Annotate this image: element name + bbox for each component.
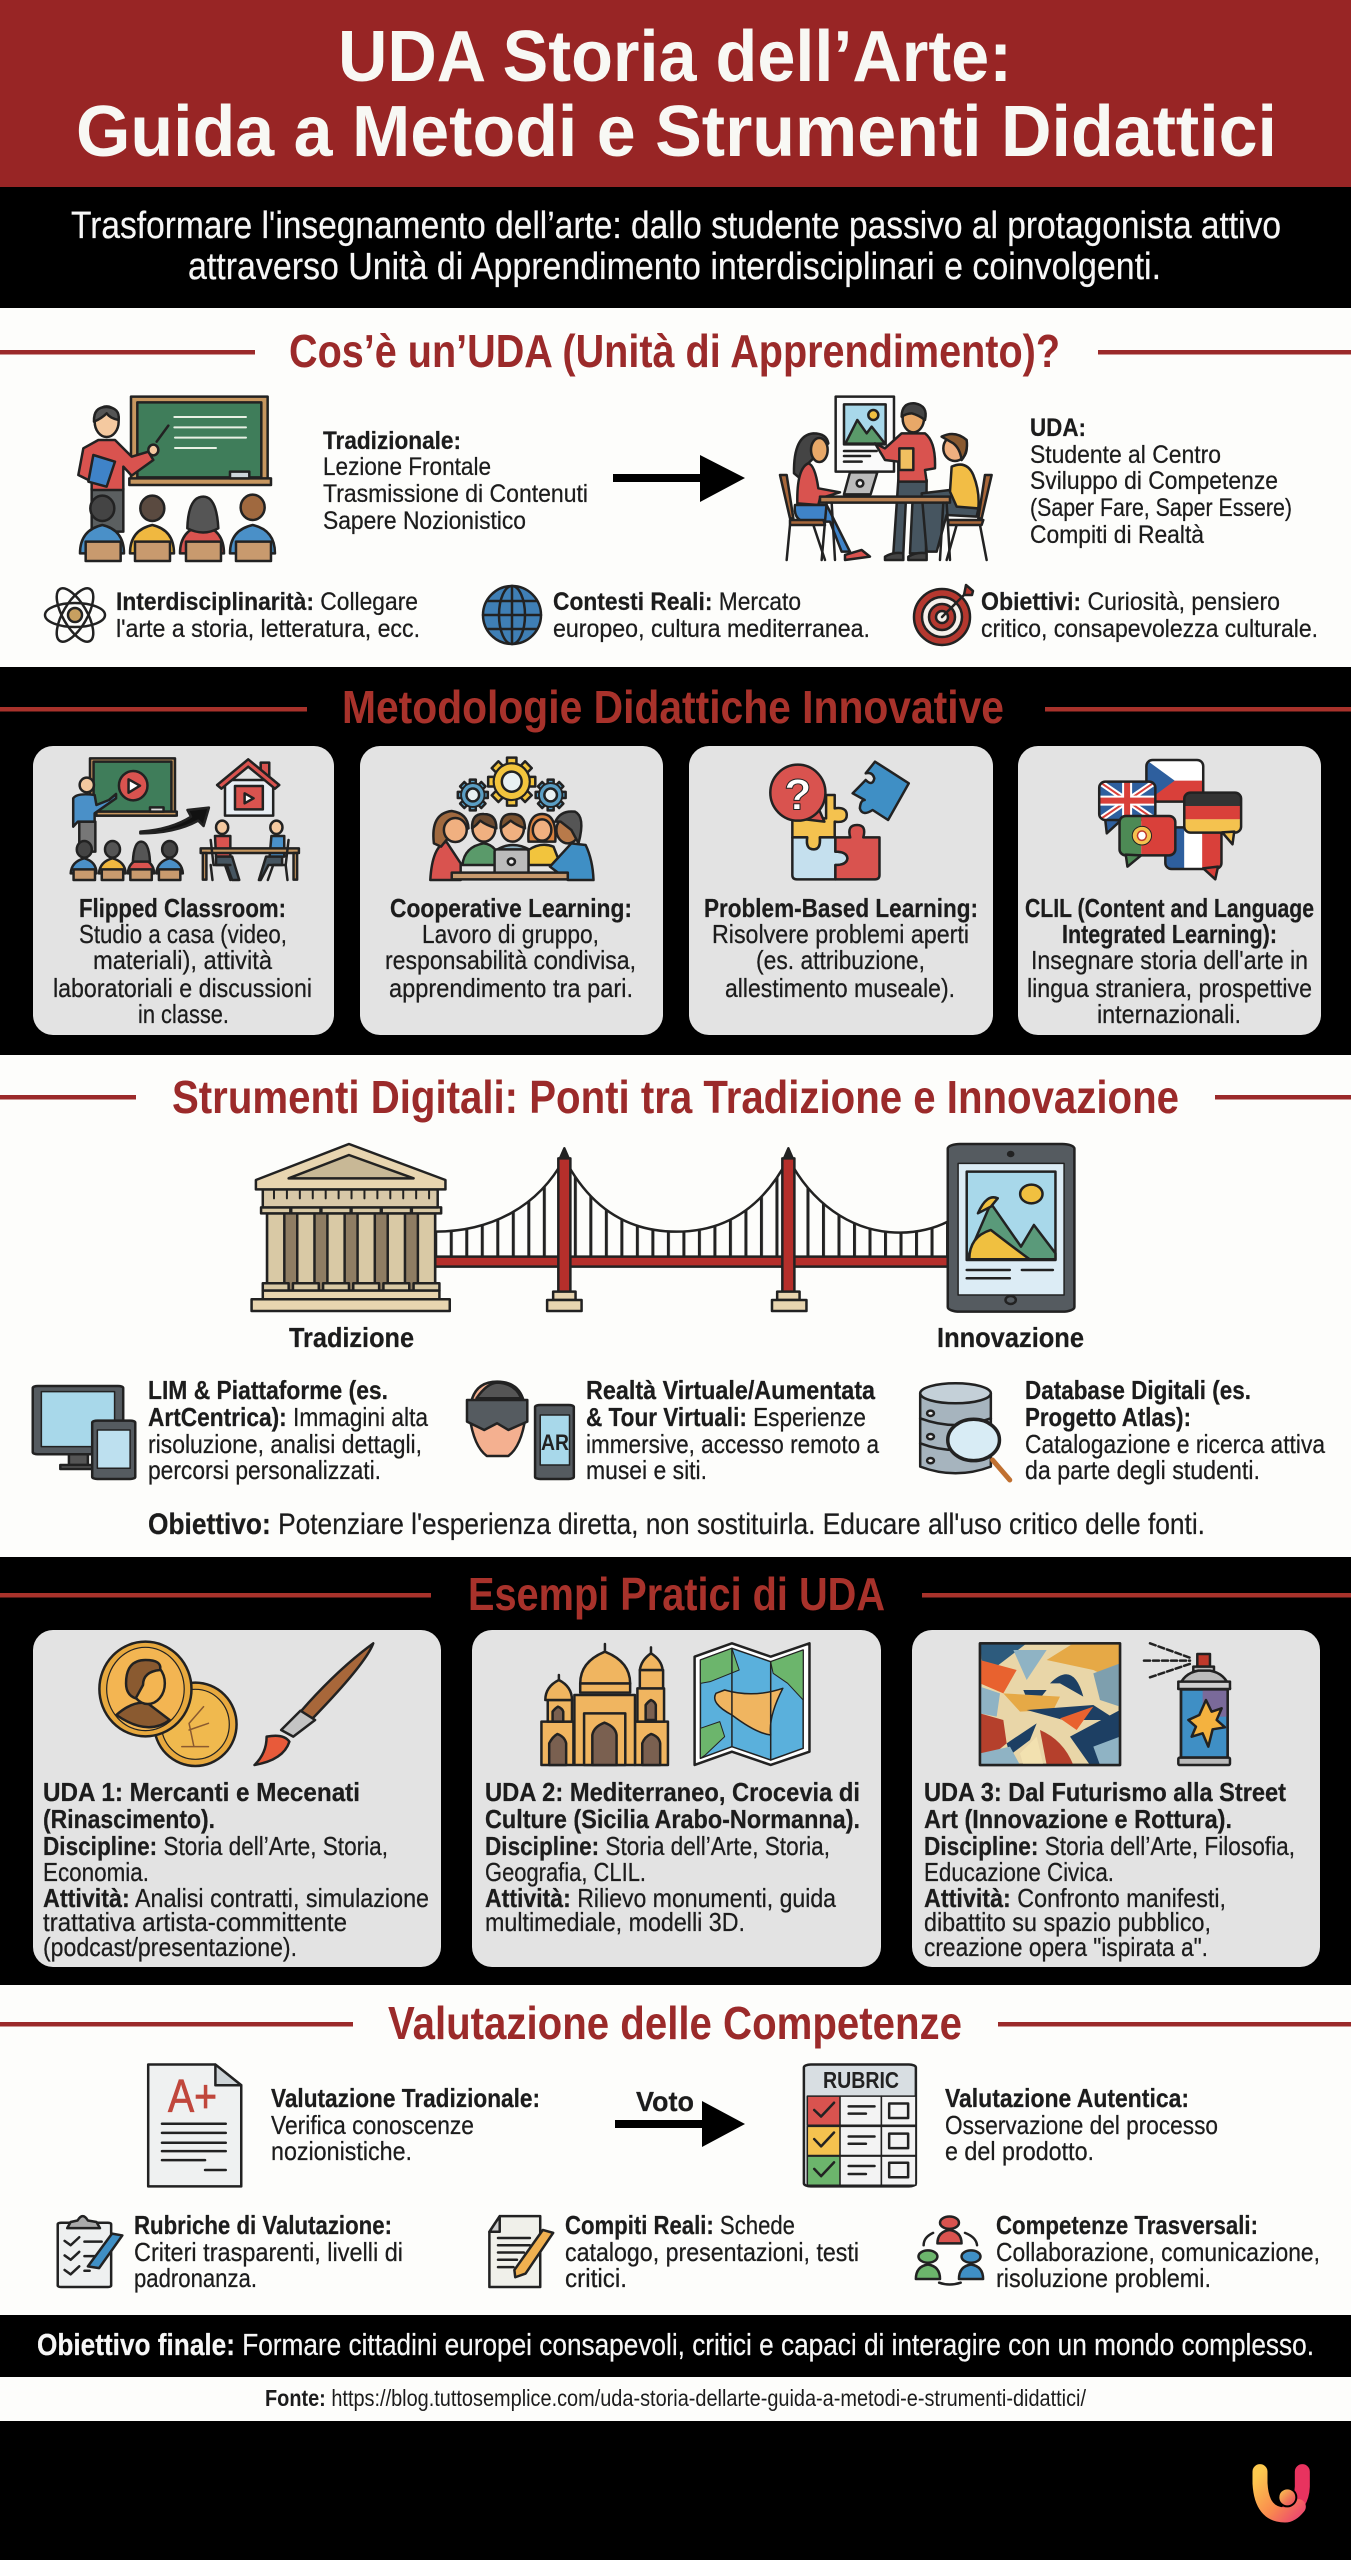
text: flipped classroom — [53, 893, 312, 1029]
panel: esempi pratici — [0, 1557, 1351, 1985]
text: UDA 1: (Rinascimento). — [43, 1804, 215, 1834]
text: problem-based learning: Risolvere problemi aperti — [712, 919, 969, 949]
banner: obiettivo finale — [0, 2315, 1351, 2377]
text: UDA 3: Art (Innovazione e Rottura). — [924, 1804, 1232, 1834]
text: contesti reali: Contesti Reali: Mercato — [553, 588, 801, 616]
panel: cos'è un'UDA — [0, 308, 1351, 667]
text: valutazione autentica: e del prodotto. — [945, 2136, 1094, 2166]
text: UDA: (Saper Fare, Saper Essere) — [1030, 494, 1292, 522]
text: UDA 3 — [924, 1777, 1295, 1962]
text: UDA 2: multimediale, modelli 3D. — [485, 1907, 745, 1937]
icon: database — [920, 1383, 1010, 1480]
text: UDA 3: dibattito su spazio pubblico, — [924, 1907, 1211, 1937]
text: tradizionale: Tradizionale: — [323, 427, 461, 455]
text: UDA 2: Discipline: Storia dell’Arte, Storia, — [485, 1831, 830, 1861]
text: UDA 2: Geografia, CLIL. — [485, 1857, 646, 1887]
icon: logo — [1260, 2472, 1302, 2515]
text: interdisciplinarità: Interdisciplinarità: Collegare — [116, 588, 418, 616]
text: realtà virtuale: & Tour Virtuali: Esperienze — [586, 1402, 866, 1432]
icon: A+ test paper: A+ — [168, 2070, 217, 2122]
icon: VR headset and AR phone — [467, 1382, 574, 1479]
icon: flags — [1099, 760, 1241, 879]
icon: flipped classroom — [71, 758, 299, 880]
text: compiti reali: critici. — [565, 2263, 627, 2293]
label: AR: AR — [541, 1430, 569, 1455]
text: contesti reali — [553, 588, 870, 643]
text: UDA 1: (podcast/presentazione). — [43, 1932, 297, 1962]
text: interdisciplinarità: l'arte a storia, letteratura, ecc. — [116, 615, 420, 643]
text: valutazione autentica: Osservazione del processo — [945, 2110, 1218, 2140]
text: UDA 1: Attività: Analisi contratti, simulazione — [43, 1883, 429, 1913]
text: tradizionale: Sapere Nozionistico — [323, 507, 526, 535]
heading: strumenti digitali: Strumenti Digitali: Ponti tra Tradizione e Innovazione — [172, 1071, 1179, 1123]
label: tradizione: Tradizione — [289, 1322, 414, 1353]
text: rubriche: padronanza. — [134, 2263, 257, 2293]
text: valutazione autentica: Valutazione Autentica: — [945, 2083, 1189, 2113]
icon: coins and brush — [99, 1642, 373, 1766]
text: valutazione tradizionale — [271, 2083, 540, 2166]
text: UDA 1: Discipline: Storia dell’Arte, Storia, — [43, 1831, 388, 1861]
text: competenze trasversali: risoluzione problemi. — [996, 2263, 1211, 2293]
icon: rubric: RUBRIC — [823, 2067, 899, 2093]
panel: strumenti digitali — [0, 1055, 1351, 1557]
heading: cos'è un'UDA — [0, 325, 1351, 377]
label: innovazione: Innovazione — [937, 1322, 1084, 1353]
text: UDA: Sviluppo di Competenze — [1030, 467, 1278, 495]
heading: valutazione: Valutazione delle Competenze — [388, 1997, 962, 2049]
text: valutazione autentica — [945, 2083, 1218, 2166]
text: CLIL — [1025, 893, 1314, 1029]
icon: temple — [252, 1144, 450, 1311]
card: cooperative learning — [360, 746, 663, 1035]
card: problem-based learning — [689, 746, 993, 1035]
text: UDA 3: Educazione Civica. — [924, 1857, 1114, 1887]
icon: mosque and map — [541, 1643, 809, 1765]
text: competenze trasversali: Competenze Trasversali: — [996, 2210, 1258, 2240]
text: UDA 3: creazione opera "ispirata a". — [924, 1932, 1208, 1962]
panel: metodologie didattiche — [0, 690, 1351, 1035]
panel: valutazione — [0, 1985, 1351, 2315]
text: LIM — [148, 1375, 428, 1485]
text: rubriche: Criteri trasparenti, livelli di — [134, 2237, 403, 2267]
text: database digitali — [1025, 1375, 1325, 1485]
text: UDA: Compiti di Realtà — [1030, 521, 1204, 549]
text: CLIL: Insegnare storia dell'arte in — [1031, 945, 1308, 975]
icon: target — [914, 585, 973, 645]
icon: UDA group work — [780, 397, 992, 560]
text: interdisciplinarità — [116, 588, 420, 643]
card: CLIL — [1018, 746, 1321, 1035]
text: UDA 2: UDA 2: Mediterraneo, Crocevia di — [485, 1777, 860, 1807]
text: UDA 2: Culture (Sicilia Arabo-Normanna). — [485, 1804, 860, 1834]
subtitle band: attraverso Unità di Apprendimento interdisciplinari e coinvolgenti. — [188, 246, 1161, 288]
text: UDA 1: Economia. — [43, 1857, 149, 1887]
text: database digitali: Database Digitali (es. — [1025, 1375, 1251, 1405]
icon: traditional lesson — [78, 397, 275, 561]
icon: tablet — [948, 1144, 1074, 1312]
arrow: traditional to UDA — [613, 455, 745, 502]
icon: atom — [45, 583, 105, 647]
text: compiti reali: Compiti Reali: Schede — [565, 2210, 795, 2240]
icon: rubric — [804, 2065, 916, 2186]
header: title banner: Guida a Metodi e Strumenti Didattici — [76, 92, 1277, 172]
header: title banner: UDA Storia dell’Arte: — [338, 17, 1012, 97]
heading: metodologie — [0, 681, 1351, 733]
text: cooperative learning: responsabilità condivisa, — [385, 945, 636, 975]
icon: A+ test paper — [148, 2065, 241, 2186]
card: UDA 1 — [33, 1630, 441, 1967]
text: realtà virtuale: musei e siti. — [586, 1455, 707, 1485]
icon: monitor and phone — [33, 1386, 135, 1479]
heading: metodologie: Metodologie Didattiche Innovative — [342, 681, 1004, 733]
text: cooperative learning: Lavoro di gruppo, — [422, 919, 599, 949]
text: problem-based learning — [704, 893, 978, 1003]
icon: puzzle: ? — [784, 771, 812, 819]
text: realtà virtuale: Realtà Virtuale/Aumentata — [586, 1375, 875, 1405]
text: flipped classroom: in classe. — [138, 999, 229, 1029]
text: database digitali: da parte degli studenti. — [1025, 1455, 1260, 1485]
header: title banner — [0, 0, 1351, 187]
text: flipped classroom: laboratoriali e discussioni — [53, 973, 312, 1003]
card: flipped classroom — [33, 746, 334, 1035]
text: compiti reali: catalogo, presentazioni, testi — [565, 2237, 859, 2267]
text: UDA 2: Attività: Rilievo monumenti, guida — [485, 1883, 836, 1913]
text: realtà virtuale — [586, 1375, 879, 1485]
text: flipped classroom: Studio a casa (video, — [79, 919, 287, 949]
heading: valutazione — [0, 1997, 1351, 2049]
text: UDA 3: UDA 3: Dal Futurismo alla Street — [924, 1777, 1286, 1807]
text: UDA: UDA: — [1030, 414, 1086, 442]
text: contesti reali: europeo, cultura mediterranea. — [553, 615, 870, 643]
text: UDA 1 — [43, 1777, 429, 1962]
text: obiettivi: critico, consapevolezza culturale. — [981, 615, 1318, 643]
text: problem-based learning: allestimento museale). — [725, 973, 955, 1003]
icon: clipboard — [58, 2216, 122, 2287]
icon: bridge — [435, 1148, 948, 1311]
arrow: voto — [615, 2086, 745, 2147]
text: problem-based learning: (es. attribuzione, — [756, 945, 925, 975]
text: UDA — [1030, 414, 1292, 549]
text: obiettivi: Obiettivi: Curiosità, pensiero — [981, 588, 1280, 616]
text: rubriche: Rubriche di Valutazione: — [134, 2210, 392, 2240]
text: UDA 1: trattativa artista-committente — [43, 1907, 347, 1937]
text: UDA 2 — [485, 1777, 860, 1937]
text: tradizionale: Lezione Frontale — [323, 453, 491, 481]
text: UDA 3: Discipline: Storia dell’Arte, Filosofia, — [924, 1831, 1295, 1861]
text: UDA: Studente al Centro — [1030, 441, 1221, 469]
text: UDA 1: UDA 1: Mercanti e Mecenati — [43, 1777, 360, 1807]
text: valutazione tradizionale: Verifica conoscenze — [271, 2110, 474, 2140]
icon: cooperative learning — [430, 758, 594, 880]
icon: painting and spray can — [980, 1643, 1230, 1765]
text: realtà virtuale: immersive, accesso remoto a — [586, 1429, 879, 1459]
text: cooperative learning — [385, 893, 636, 1003]
text: LIM: risoluzione, analisi dettagli, — [148, 1429, 422, 1459]
text: database digitali: Progetto Atlas): — [1025, 1402, 1191, 1432]
icon: document and pencil — [489, 2216, 553, 2287]
text: CLIL: internazionali. — [1097, 999, 1241, 1029]
arrow: voto: Voto — [636, 2086, 694, 2117]
text: cooperative learning: apprendimento tra pari. — [389, 973, 633, 1003]
source line: Fonte: https://blog.tuttosemplice.com/uda-storia-dellarte-guida-a-metodi-e-strumenti-didattici/ — [265, 2385, 1087, 2411]
icon: people network — [916, 2217, 983, 2285]
text: tradizionale — [323, 427, 588, 535]
text: CLIL: lingua straniera, prospettive — [1027, 973, 1312, 1003]
text: valutazione tradizionale: nozionistiche. — [271, 2136, 412, 2166]
text: CLIL: Integrated Learning): — [1062, 919, 1277, 949]
text: cooperative learning: Cooperative Learning: — [390, 893, 632, 923]
text: valutazione tradizionale: Valutazione Tradizionale: — [271, 2083, 540, 2113]
text: obiettivi — [981, 588, 1318, 643]
text: obiettivo: Obiettivo: Potenziare l'esperienza diretta, non sostituirla. Educare all'uso critico delle fonti. — [148, 1508, 1205, 1541]
heading: esempi pratici — [0, 1568, 1351, 1620]
subtitle band — [0, 187, 1351, 308]
text: LIM: percorsi personalizzati. — [148, 1455, 381, 1485]
text: UDA 3: Attività: Confronto manifesti, — [924, 1883, 1226, 1913]
heading: cos'è un'UDA: Cos’è un’UDA (Unità di Apprendimento)? — [289, 325, 1060, 377]
text: rubriche — [134, 2210, 403, 2293]
text: problem-based learning: Problem-Based Learning: — [704, 893, 978, 923]
text: flipped classroom: materiali), attività — [93, 945, 272, 975]
text: LIM: ArtCentrica): Immagini alta — [148, 1402, 428, 1432]
icon: globe — [483, 586, 541, 644]
text: LIM: LIM & Piattaforme (es. — [148, 1375, 388, 1405]
text: flipped classroom: Flipped Classroom: — [79, 893, 286, 923]
text: tradizionale: Trasmissione di Contenuti — [323, 480, 588, 508]
icon: puzzle — [770, 762, 909, 879]
text: compiti reali — [565, 2210, 859, 2293]
card: UDA 3 — [912, 1630, 1320, 1967]
heading: esempi pratici: Esempi Pratici di UDA — [468, 1568, 885, 1620]
source line — [0, 2377, 1351, 2421]
text: competenze trasversali — [996, 2210, 1320, 2293]
card: UDA 2 — [472, 1630, 881, 1967]
